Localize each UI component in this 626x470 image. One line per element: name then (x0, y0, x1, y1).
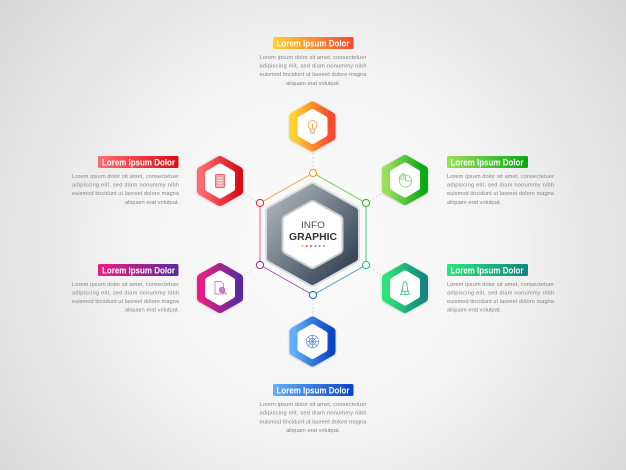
paragraph: green: adipiscing elit, sed diam nonummy nibh (447, 183, 554, 189)
paragraph: teal: Lorem ipsum dolor sit amet, consectetuer (447, 282, 554, 288)
center title (289, 220, 337, 243)
node: purple hexagon (202, 268, 238, 308)
paragraph: blue (260, 402, 367, 434)
paragraph: purple: euismod tincidunt ut laoreet dolore magna (72, 299, 180, 305)
icon: light bulb (308, 121, 317, 134)
paragraph: teal: euismod tincidunt ut laoreet dolore magna (447, 299, 555, 305)
node: red hexagon (202, 160, 238, 202)
paragraph: blue: Lorem ipsum dolor sit amet, consectetuer (260, 402, 367, 408)
paragraph: teal: aliquam erat volutpat. (447, 308, 501, 314)
paragraph: top: adipiscing elit, sed diam nonummy nibh (260, 64, 366, 70)
icon: clipboard (216, 174, 224, 188)
paragraph: purple: Lorem ipsum dolor sit amet, consectetuer (72, 282, 179, 288)
paragraph: top: euismod tincidunt ut laoreet dolore magna (260, 72, 367, 78)
paragraph: red: adipiscing elit, sed diam nonummy nibh (72, 183, 179, 189)
node: top yellow hexagon (294, 106, 331, 147)
block: green (447, 156, 555, 206)
label: green: Lorem Ipsum Dolor (450, 157, 524, 167)
block: purple (72, 264, 180, 314)
paragraph: teal (447, 282, 555, 314)
paragraph: top (260, 55, 367, 87)
paragraph: purple: aliquam erat volutpat. (125, 308, 179, 314)
icon: network globe (306, 335, 319, 348)
node: blue hexagon (294, 321, 331, 362)
center title: GRAPHIC (289, 232, 337, 243)
paragraph: red: euismod tincidunt ut laoreet dolore magna (72, 191, 180, 197)
icon: rocket (400, 281, 410, 294)
paragraph: red (72, 174, 180, 206)
paragraph: green: Lorem ipsum dolor sit amet, consectetuer (447, 174, 554, 180)
paragraph: blue: euismod tincidunt ut laoreet dolore magna (260, 419, 367, 425)
label: teal: Lorem Ipsum Dolor (450, 265, 524, 275)
dotted connectors (244, 153, 381, 315)
paragraph: green (447, 174, 555, 206)
paragraph: purple: adipiscing elit, sed diam nonummy nibh (72, 290, 179, 296)
label: purple: Lorem Ipsum Dolor (102, 265, 175, 275)
paragraph: blue: adipiscing elit, sed diam nonummy nibh (260, 411, 366, 417)
block: blue (260, 384, 367, 434)
center colour dots (302, 245, 325, 247)
label: blue: Lorem Ipsum Dolor (276, 385, 350, 395)
central hexagon (270, 188, 354, 282)
block: red (72, 156, 180, 206)
paragraph: green: aliquam erat volutpat. (447, 200, 501, 206)
paragraph: red: aliquam erat volutpat. (125, 200, 179, 206)
icon: pie chart (399, 174, 412, 187)
paragraph: teal: adipiscing elit, sed diam nonummy nibh (447, 290, 554, 296)
paragraph: green: euismod tincidunt ut laoreet dolore magna (447, 191, 555, 197)
block: teal (447, 264, 555, 314)
connector ring (256, 169, 370, 299)
paragraph: red: Lorem ipsum dolor sit amet, consectetuer (72, 174, 179, 180)
paragraph: top: Lorem ipsum dolor sit amet, consectetuer (260, 55, 367, 61)
node: teal hexagon (386, 268, 424, 308)
paragraph: top: aliquam erat volutpat. (286, 81, 340, 87)
label: top: Lorem Ipsum Dolor (276, 38, 350, 48)
center title: INFO (301, 220, 325, 231)
block: top (260, 37, 367, 87)
label: red: Lorem Ipsum Dolor (102, 157, 175, 167)
node: green hexagon (386, 160, 424, 200)
paragraph: purple (72, 282, 180, 314)
icon: document search (215, 282, 226, 294)
paragraph: blue: aliquam erat volutpat. (286, 428, 340, 434)
